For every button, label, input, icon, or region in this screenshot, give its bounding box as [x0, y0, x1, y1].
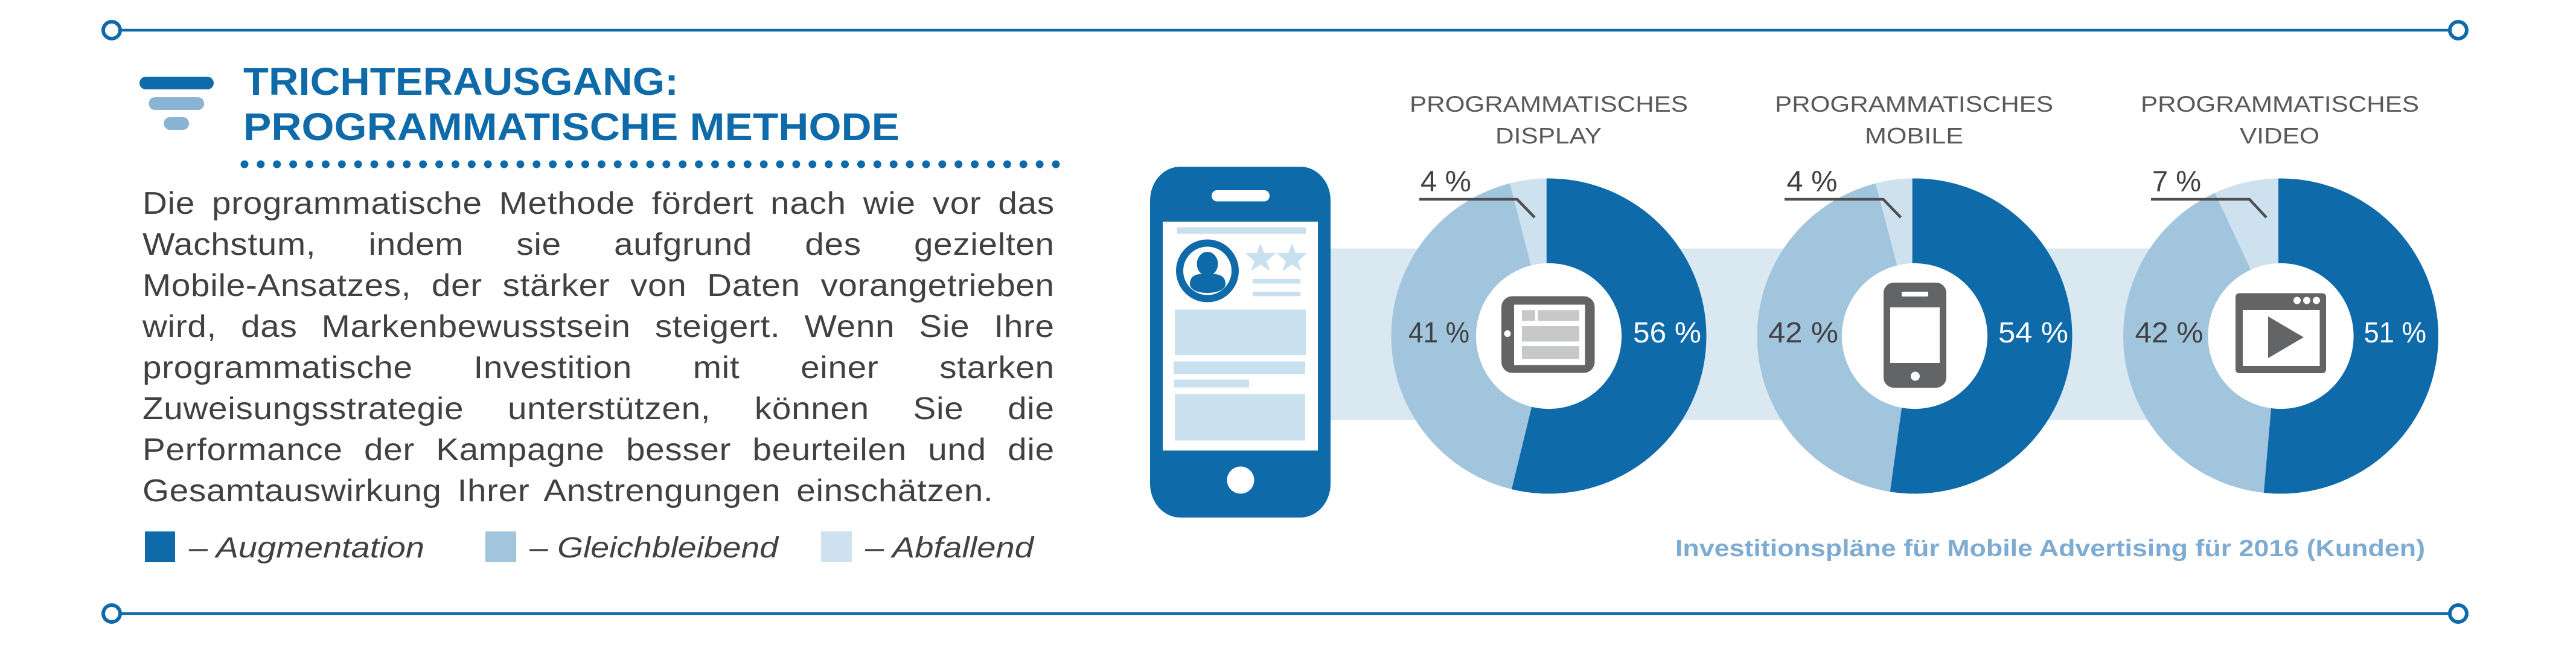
- body text: [142, 186, 1055, 508]
- body text: programmatische Investition mit einer starken: [142, 350, 1055, 385]
- heading: programmatisches display: PROGRAMMATISCHES: [1410, 92, 1688, 117]
- value: 51 %: 51 %: [2364, 317, 2426, 349]
- value: 7 %: 7 %: [2152, 165, 2201, 198]
- heading: programmatisches video: PROGRAMMATISCHES: [2141, 92, 2419, 117]
- connecting band behind donuts: [1331, 249, 2176, 420]
- value: 4 %: [1785, 165, 1900, 217]
- title: [243, 60, 900, 149]
- heading: programmatisches mobile: MOBILE: [1865, 123, 1963, 149]
- heading: programmatisches display: [1410, 92, 1688, 149]
- icon: smartphone with app screen: [1150, 167, 1331, 518]
- legend item: Abfallend: [821, 531, 1035, 564]
- donut chart: display: [1391, 165, 1721, 507]
- value: 54 %: 54 %: [1998, 317, 2068, 349]
- body text: Die programmatische Methode fördert nach wie vor das: [142, 186, 1055, 221]
- icon: funnel: [139, 77, 214, 130]
- legend item: Gleichbleibend: – Gleichbleibend: [529, 532, 779, 564]
- body text: Zuweisungsstrategie unterstützen, können Sie die: [142, 391, 1055, 426]
- value: 42 %: 42 %: [1768, 317, 1838, 349]
- heading: programmatisches video: [2141, 92, 2419, 149]
- top rule with end circles: [103, 22, 2467, 39]
- body text: Wachstum, indem sie aufgrund des gezielten: [142, 227, 1055, 262]
- body text: Performance der Kampagne besser beurteilen und die: [142, 432, 1055, 467]
- donut chart: video: [2123, 165, 2451, 507]
- heading: programmatisches mobile: [1775, 92, 2053, 149]
- title: TRICHTERAUSGANG:: [243, 60, 679, 103]
- title: PROGRAMMATISCHE METHODE: [243, 105, 900, 149]
- bottom rule with end circles: [103, 605, 2467, 622]
- legend: [145, 531, 1035, 564]
- heading: programmatisches display: DISPLAY: [1495, 123, 1602, 149]
- value: 42 %: 42 %: [2135, 317, 2204, 349]
- icon: video player: [2236, 293, 2326, 373]
- body text: Gesamtauswirkung Ihrer Anstrengungen einschätzen.: [142, 473, 993, 508]
- value: 41 %: 41 %: [1408, 317, 1469, 349]
- donut chart: mobile: [1757, 165, 2083, 507]
- chart caption: Investitionspläne für Mobile Advertising für 2016 (Kunden): [1675, 536, 2425, 562]
- heading: programmatisches video: VIDEO: [2240, 123, 2319, 149]
- icon: tablet: [1501, 296, 1595, 373]
- value: 4 %: 4 %: [1787, 165, 1838, 198]
- legend item: Augmentation: – Augmentation: [188, 532, 424, 564]
- legend item: Abfallend: – Abfallend: [865, 532, 1035, 564]
- value: 4 %: [1419, 165, 1535, 217]
- value: 4 %: 4 %: [1421, 165, 1471, 198]
- icon: phone: [1884, 283, 1946, 388]
- value: 7 %: [2151, 165, 2266, 217]
- dotted title underline: [244, 161, 1056, 168]
- heading: programmatisches mobile: PROGRAMMATISCHES: [1775, 92, 2053, 117]
- value: 56 %: 56 %: [1633, 317, 1701, 349]
- body text: wird, das Markenbewusstsein steigert. Wenn Sie Ihre: [142, 309, 1055, 344]
- body text: Mobile-Ansatzes, der stärker von Daten vorangetrieben: [142, 268, 1055, 303]
